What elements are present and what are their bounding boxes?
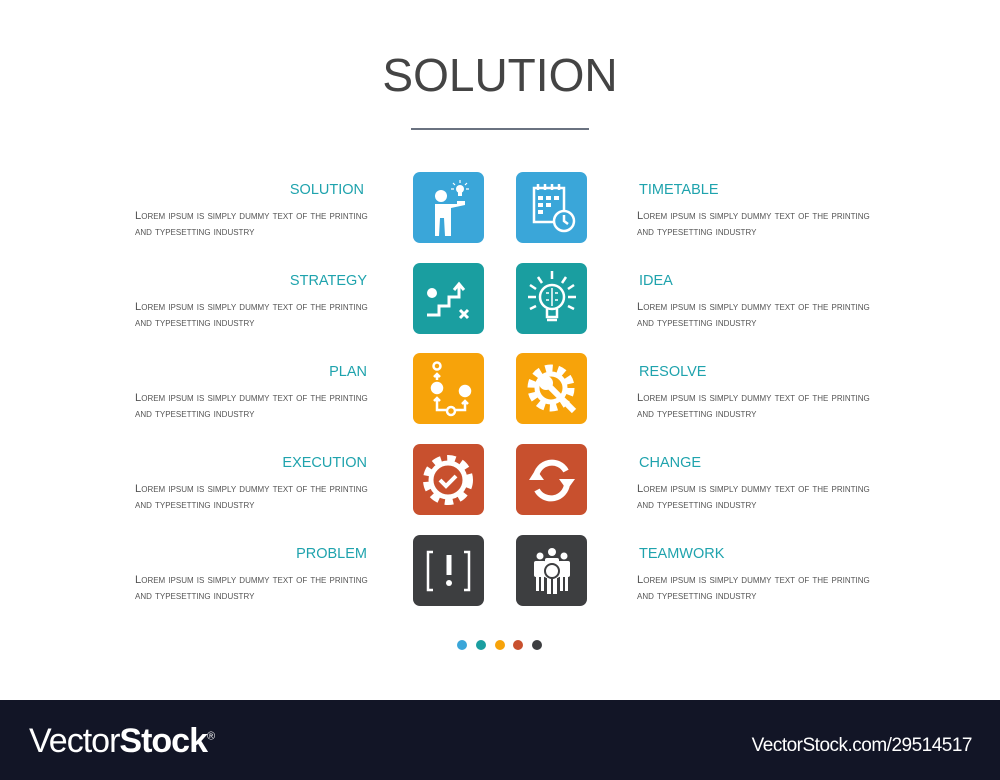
icon: execution gear check (413, 444, 484, 515)
icon: change cycle arrows (516, 444, 587, 515)
right item: idea (637, 273, 870, 329)
right item: idea: IDEA (639, 273, 673, 289)
right item: idea: and typesetting industry (637, 317, 756, 329)
left item: plan: and typesetting industry (135, 408, 254, 420)
right item: timetable: TIMETABLE (639, 182, 718, 198)
left item: strategy: and typesetting industry (135, 317, 254, 329)
right item: timetable: Lorem ipsum is simply dummy text of the printing (637, 210, 870, 222)
icon: timetable calendar (516, 172, 587, 243)
left item: execution: EXECUTION (282, 455, 367, 471)
icon: resolve gear wrench (516, 353, 587, 424)
icon: strategy stairs (413, 263, 484, 334)
left item: execution (135, 455, 368, 511)
left item: solution: and typesetting industry (135, 226, 254, 238)
left item: problem: and typesetting industry (135, 590, 254, 602)
footer url: VectorStock.com/29514517 (752, 735, 972, 756)
left item: strategy (135, 273, 368, 329)
right item: teamwork: TEAMWORK (639, 546, 724, 562)
left item: solution (135, 182, 368, 238)
left item: problem (135, 546, 368, 602)
left item: plan: Lorem ipsum is simply dummy text of the printing (135, 392, 368, 404)
right item: teamwork (637, 546, 870, 602)
left item: strategy: STRATEGY (290, 273, 367, 289)
left item: solution: Lorem ipsum is simply dummy text of the printing (135, 210, 368, 222)
right item: timetable: and typesetting industry (637, 226, 756, 238)
left item: problem: PROBLEM (296, 546, 367, 562)
icon: idea bulb (516, 263, 587, 334)
right item: resolve (637, 364, 870, 420)
right item: teamwork: and typesetting industry (637, 590, 756, 602)
right item: change: CHANGE (639, 455, 701, 471)
left item: plan: PLAN (329, 364, 367, 380)
right item: teamwork: Lorem ipsum is simply dummy text of the printing (637, 574, 870, 586)
pagination dots (457, 640, 542, 650)
left item: plan (135, 364, 368, 420)
right item: idea: Lorem ipsum is simply dummy text of the printing (637, 301, 870, 313)
icon: teamwork people (516, 535, 587, 606)
right item: resolve: Lorem ipsum is simply dummy text of the printing (637, 392, 870, 404)
left item: strategy: Lorem ipsum is simply dummy text of the printing (135, 301, 368, 313)
left item: execution: Lorem ipsum is simply dummy text of the printing (135, 483, 368, 495)
icon: solution person (413, 172, 484, 243)
footer banner (0, 700, 1000, 780)
icon: plan flow (413, 353, 484, 424)
left item: execution: and typesetting industry (135, 499, 254, 511)
right item: timetable (637, 182, 870, 238)
right item: change: Lorem ipsum is simply dummy text of the printing (637, 483, 870, 495)
right item: change: and typesetting industry (637, 499, 756, 511)
right item: change (637, 455, 870, 511)
footer logo: VectorStock® (29, 722, 214, 760)
left item: problem: Lorem ipsum is simply dummy text of the printing (135, 574, 368, 586)
title: SOLUTION (382, 49, 618, 101)
icon: problem exclamation (413, 535, 484, 606)
right item: resolve: and typesetting industry (637, 408, 756, 420)
left item: solution: SOLUTION (290, 182, 364, 198)
right item: resolve: RESOLVE (639, 364, 706, 380)
